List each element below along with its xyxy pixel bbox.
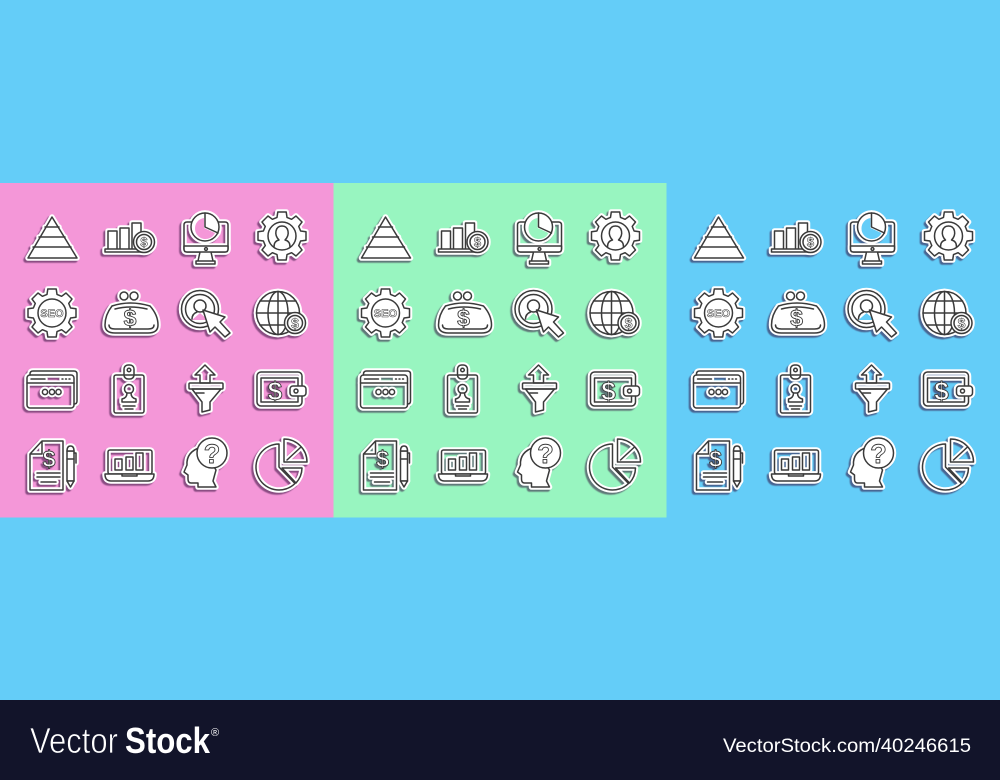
- icon: user target with cursor: [515, 290, 564, 337]
- icon: bar chart with coin: [772, 223, 821, 252]
- icon: bar chart with coin: $: [474, 234, 482, 250]
- panel: blue icon set: [666, 183, 1000, 518]
- icon: purse with dollar: $: [790, 305, 803, 331]
- icon: browser window: [694, 371, 744, 408]
- icon: head with question mark: ?: [204, 439, 220, 469]
- icon: head with question mark: [184, 438, 227, 487]
- icon: gear with user: [258, 212, 306, 260]
- icon: financial document and pen: [696, 441, 742, 490]
- icon: monitor with pie chart: [518, 213, 562, 264]
- icon: pyramid: [362, 217, 410, 258]
- icon: pyramid: [694, 217, 744, 258]
- footer bar: [0, 700, 1000, 780]
- icon: bar chart with coin: [105, 223, 154, 252]
- icon: globe with coin: $: [291, 315, 299, 331]
- icon: financial document and pen: $: [43, 446, 56, 472]
- icon: bar chart with coin: $: [807, 234, 815, 250]
- footer logo: ®: [211, 727, 219, 739]
- icon: head with question mark: ?: [537, 439, 554, 469]
- icon: ID badge: [780, 365, 810, 413]
- icon: wallet with dollar: [257, 372, 306, 406]
- icon: pyramid: [28, 217, 77, 258]
- icon: globe with coin: $: [625, 315, 633, 331]
- icon: monitor with pie chart: [184, 213, 228, 264]
- icon: SEO gear: SEO: [707, 308, 731, 320]
- icon: user target with cursor: [182, 290, 230, 337]
- icon: globe with coin: [923, 292, 972, 334]
- icon: financial document and pen: [364, 441, 410, 490]
- icon: financial document and pen: $: [709, 446, 722, 472]
- icon: ID badge: [448, 365, 478, 413]
- icon: wallet with dollar: $: [934, 376, 949, 406]
- icon: pie chart: [589, 439, 640, 490]
- icon: purse with dollar: [105, 292, 158, 333]
- icon: user target with cursor: [848, 290, 896, 337]
- icon: SEO gear: SEO: [374, 308, 398, 320]
- icon: head with question mark: ?: [870, 439, 887, 469]
- icon: SEO gear: SEO: [40, 308, 64, 320]
- icon: gear with user: [924, 212, 972, 260]
- footer logo: Stock: [125, 720, 211, 761]
- icon: funnel with arrow: [856, 365, 890, 412]
- icon: pie chart: [922, 439, 974, 490]
- icon: financial document and pen: $: [376, 446, 389, 472]
- icon: wallet with dollar: $: [601, 376, 616, 406]
- icon: globe with coin: [256, 292, 306, 334]
- icon: purse with dollar: $: [124, 305, 137, 331]
- panel: green icon set: [334, 183, 666, 518]
- icon: head with question mark: [850, 438, 894, 487]
- icon: financial document and pen: [30, 441, 76, 490]
- icon: wallet with dollar: $: [268, 376, 283, 406]
- icon: SEO gear: [694, 289, 742, 337]
- icon: purse with dollar: [438, 292, 492, 333]
- icon: laptop with bars: [105, 450, 154, 481]
- icon: globe with coin: $: [958, 315, 966, 331]
- footer image id: VectorStock.com/40246615: [723, 736, 971, 757]
- footer logo: Vector: [30, 720, 118, 761]
- footer logo: [30, 720, 219, 761]
- icon: bar chart with coin: [438, 223, 488, 252]
- icon: laptop with bars: [438, 450, 488, 481]
- icon: SEO gear: [362, 289, 410, 337]
- icon: SEO gear: [28, 289, 76, 337]
- icon: purse with dollar: [772, 292, 824, 333]
- icon: gear with user: [592, 212, 640, 260]
- panel: pink icon set: [0, 183, 334, 518]
- icon: wallet with dollar: [924, 372, 972, 406]
- icon: purse with dollar: $: [457, 305, 470, 331]
- icon: wallet with dollar: [590, 372, 640, 406]
- icon: ID badge: [114, 365, 144, 413]
- icon: monitor with pie chart: [850, 213, 894, 264]
- icon: globe with coin: [590, 292, 639, 334]
- icon: head with question mark: [518, 438, 560, 487]
- icon: bar chart with coin: $: [140, 234, 148, 250]
- icon: funnel with arrow: [189, 365, 223, 412]
- icon: funnel with arrow: [522, 365, 556, 412]
- icon: pie chart: [256, 439, 307, 490]
- icon: browser window: [27, 371, 77, 408]
- icon: laptop with bars: [772, 450, 820, 481]
- icon: browser window: [360, 371, 410, 408]
